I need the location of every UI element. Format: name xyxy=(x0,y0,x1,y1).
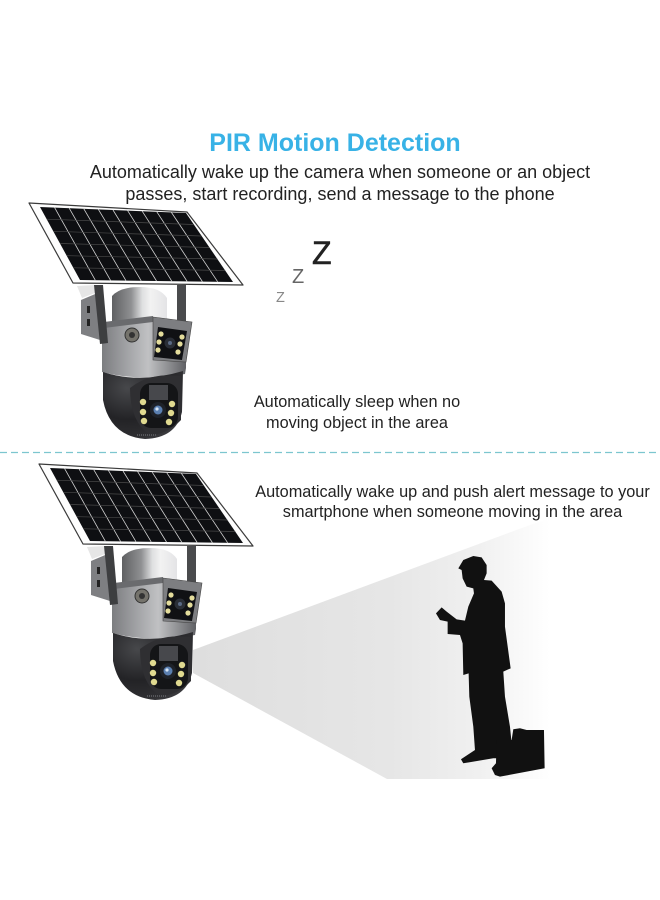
wake caption xyxy=(255,483,650,521)
sleep caption: moving object in the area xyxy=(266,414,449,432)
icon: sleeping z letters xyxy=(276,235,332,306)
icon: sleeping z letters: Z xyxy=(312,235,332,271)
title: PIR Motion Detection xyxy=(209,129,461,157)
sleep caption: Automatically sleep when no xyxy=(254,393,460,411)
sleep caption xyxy=(254,393,460,432)
wake caption: Automatically wake up and push alert message to your xyxy=(255,483,650,501)
subtitle text: passes, start recording, send a message to the phone xyxy=(125,184,555,204)
camera awake with solar panel xyxy=(39,464,253,700)
wake caption: smartphone when someone moving in the area xyxy=(283,503,623,521)
icon: sleeping z letters: Z xyxy=(292,266,304,288)
person silhouette with briefcase xyxy=(436,556,545,777)
detection beam xyxy=(193,515,560,779)
camera sleeping with solar panel xyxy=(29,203,243,439)
subtitle text: Automatically wake up the camera when someone or an object xyxy=(90,162,590,182)
subtitle text xyxy=(90,162,590,204)
icon: sleeping z letters: Z xyxy=(276,290,285,306)
